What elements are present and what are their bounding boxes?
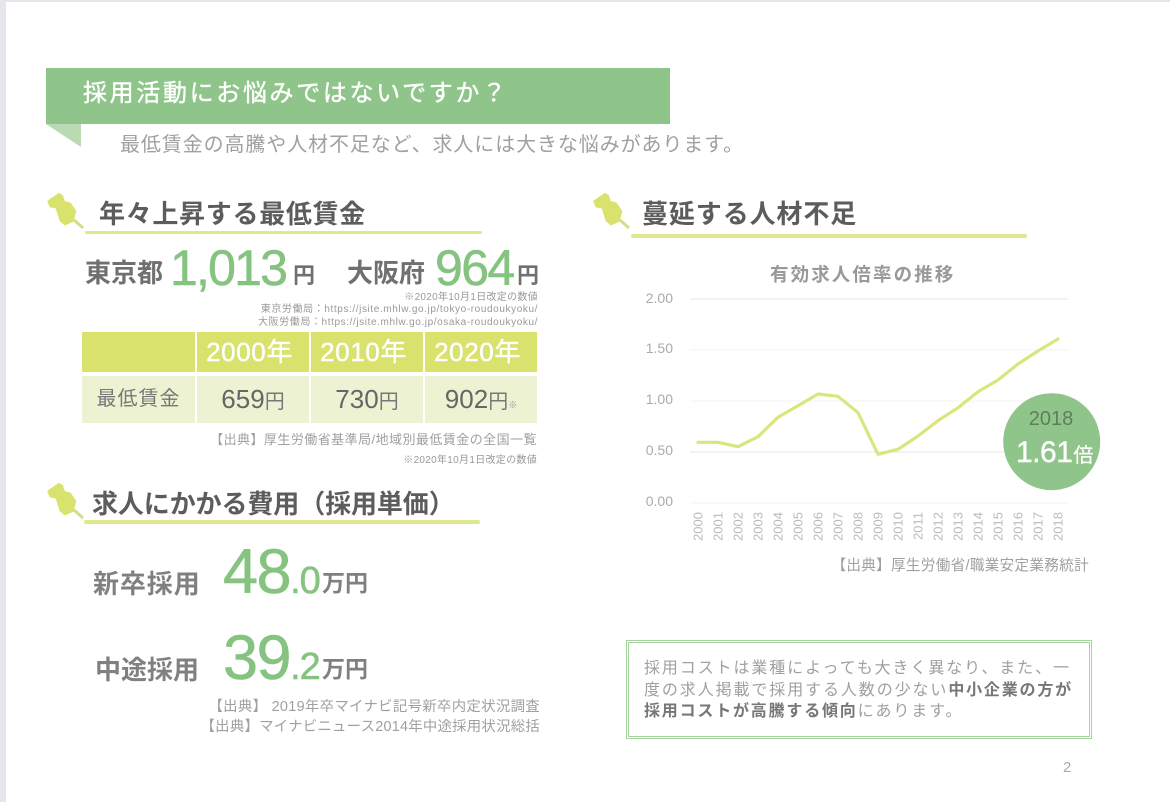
x axis labels: 2006 <box>810 512 826 541</box>
callout circle: 2018 value <box>1003 393 1100 490</box>
callout circle: 2018 value: 1.61倍 <box>1016 436 1093 469</box>
section heading: talent shortage <box>593 193 1027 238</box>
x axis labels: 2011 <box>910 512 926 540</box>
mid-career cost: 39.2 <box>223 623 320 693</box>
section: hiring cost <box>47 483 540 735</box>
table: minimum wage by year: 730円 <box>335 384 399 414</box>
table: minimum wage by year: 659円 <box>221 384 285 414</box>
table: minimum wage by year <box>82 332 537 423</box>
callout text: 度の求人掲載で採用する人数の少ない中小企業の方が <box>644 682 1073 698</box>
callout box <box>626 640 1092 739</box>
table: minimum wage by year: 最低賃金 <box>96 388 180 410</box>
y axis labels: 0.50 <box>646 442 673 458</box>
tokyo wage: 1,013 <box>170 240 286 296</box>
osaka wage: 大阪府 <box>347 258 425 288</box>
page number: 2 <box>1063 759 1071 776</box>
x axis labels: 2014 <box>970 512 986 541</box>
x axis labels: 2003 <box>750 512 766 541</box>
callout text: 採用コストが高騰する傾向にあります。 <box>644 703 963 720</box>
y axis labels: 2.00 <box>646 290 673 306</box>
table: minimum wage by year: 902円※ <box>445 384 517 414</box>
osaka wage <box>347 240 539 296</box>
heading: 蔓延する人材不足 <box>642 199 857 229</box>
tokyo wage <box>85 240 315 296</box>
wage notes: ※2020年10月1日改定の数値 <box>404 292 538 303</box>
new graduate cost <box>93 537 368 607</box>
section: minimum wage <box>47 193 539 328</box>
x axis labels: 2002 <box>730 512 746 541</box>
table: minimum wage by year: 2000年 <box>206 337 293 367</box>
banner fold <box>46 124 81 147</box>
tokyo wage: 東京都 <box>85 258 163 288</box>
x axis labels: 2007 <box>830 512 846 541</box>
x axis labels: 2017 <box>1030 512 1046 541</box>
cost sources: 【出典】 2019年卒マイナビ記号新卒内定状況調査 <box>208 699 540 715</box>
line chart: job openings ratio <box>646 290 1100 541</box>
x axis labels: 2008 <box>850 512 866 541</box>
tokyo wage: 円 <box>293 263 315 288</box>
title banner <box>46 68 670 147</box>
y axis labels: 0.00 <box>646 493 673 509</box>
table source: 【出典】厚生労働省基準局/地域別最低賃金の全国一覧 <box>210 432 537 447</box>
x axis labels: 2013 <box>950 512 966 541</box>
mid-career cost: 中途採用 <box>95 655 199 685</box>
mid-career cost <box>95 623 368 693</box>
x axis labels: 2018 <box>1050 512 1066 541</box>
icon: push pin <box>47 483 84 519</box>
x axis labels: 2009 <box>870 512 886 541</box>
wage notes: 大阪労働局：https://jsite.mhlw.go.jp/osaka-roudoukyoku/ <box>258 317 538 328</box>
heading underline <box>631 234 1027 238</box>
banner title text: 採用活動にお悩みではないですか？ <box>83 80 509 107</box>
callout circle: 2018 value: 2018 <box>1029 408 1073 430</box>
osaka wage: 円 <box>517 263 539 288</box>
table: minimum wage by year: 2010年 <box>320 337 407 367</box>
new graduate cost: 48.0 <box>223 537 320 607</box>
cost sources: 【出典】マイナビニュース2014年中途採用状況総括 <box>201 719 540 735</box>
data line <box>698 339 1058 454</box>
heading: 求人にかかる費用（採用単価） <box>92 489 455 519</box>
banner bar <box>46 68 670 124</box>
table footnote: ※2020年10月1日改定の数値 <box>403 455 537 466</box>
y axis labels <box>646 290 673 509</box>
x axis labels: 2016 <box>1010 512 1026 541</box>
icon: push pin <box>593 193 630 229</box>
icon: push pin <box>47 193 84 229</box>
x axis labels: 2004 <box>770 512 786 541</box>
x axis labels: 2015 <box>990 512 1006 541</box>
wage notes: 東京労働局：https://jsite.mhlw.go.jp/tokyo-roudoukyoku/ <box>261 304 538 315</box>
heading underline <box>84 520 480 524</box>
osaka wage: 964 <box>435 240 514 296</box>
x axis labels: 2005 <box>790 512 806 541</box>
y axis labels: 1.50 <box>646 340 673 356</box>
mid-career cost: 万円 <box>322 656 368 682</box>
chart title: 有効求人倍率の推移 <box>770 264 955 285</box>
table: minimum wage by year: 2020年 <box>434 337 521 367</box>
callout text: 採用コストは業種によっても大きく異なり、また、一 <box>644 660 1071 677</box>
new graduate cost: 新卒採用 <box>93 569 201 599</box>
y axis labels: 1.00 <box>646 391 673 407</box>
subtitle: 最低賃金の高騰や人材不足など、求人には大きな悩みがあります。 <box>120 134 744 156</box>
x axis labels: 2010 <box>890 512 906 541</box>
new graduate cost: 万円 <box>322 570 368 596</box>
wage notes <box>258 291 538 328</box>
heading underline <box>85 231 482 234</box>
callout text <box>644 659 1073 720</box>
x axis labels: 2001 <box>710 512 726 541</box>
x axis labels: 2012 <box>930 512 946 541</box>
cost sources <box>201 698 540 735</box>
x axis labels: 2000 <box>690 512 706 541</box>
chart source: 【出典】厚生労働省/職業安定業務統計 <box>831 558 1089 574</box>
heading: 年々上昇する最低賃金 <box>99 199 366 229</box>
x axis labels <box>690 512 1066 541</box>
